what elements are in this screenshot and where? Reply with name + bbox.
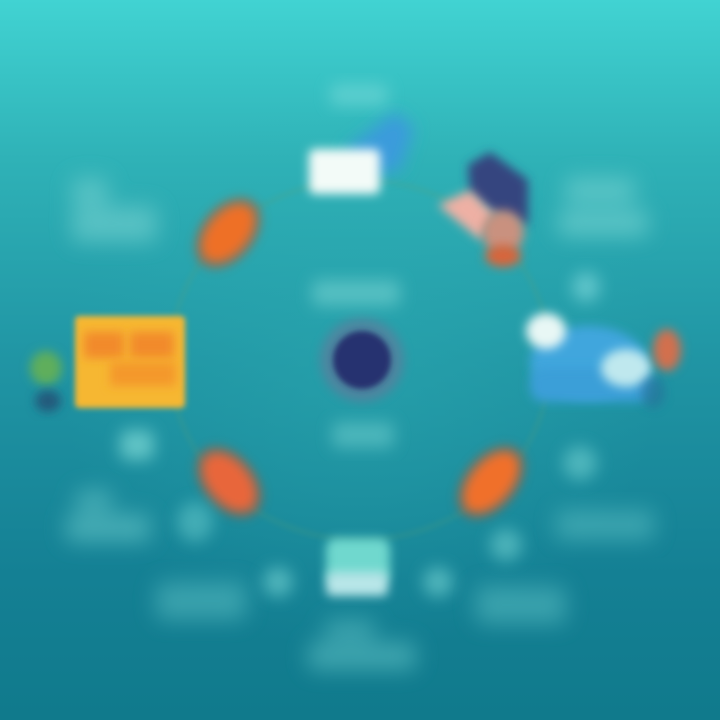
icon: orange oval lower left (182, 433, 276, 531)
icon: bottom right dot (423, 567, 453, 597)
icon: envelope (309, 112, 414, 194)
icon: bottom center box (326, 538, 390, 596)
label: lower right text (556, 510, 654, 540)
label: bottom right text (476, 586, 566, 624)
label: bottom center text (308, 620, 416, 670)
icon: orange oval upper left (181, 184, 275, 282)
icon: yellow card (30, 316, 185, 412)
icon: orange oval lower right (443, 432, 539, 532)
label: upper left text (72, 178, 157, 242)
icon: cloud (526, 272, 681, 408)
center caption (332, 422, 394, 448)
label: upper right text (558, 178, 648, 236)
icon: lower right marker (490, 446, 597, 561)
label: lower left text (66, 490, 150, 542)
central glow (60, 90, 660, 650)
center circle (320, 318, 404, 402)
label: top (330, 84, 388, 106)
label: bottom left text (156, 582, 246, 620)
center heading (312, 280, 400, 306)
icon: person (438, 152, 528, 267)
icon: small left marker (120, 430, 154, 460)
icon: bottom left dot (263, 567, 293, 597)
icon: small diagonal marker (177, 502, 213, 542)
connecting ring (170, 180, 550, 540)
